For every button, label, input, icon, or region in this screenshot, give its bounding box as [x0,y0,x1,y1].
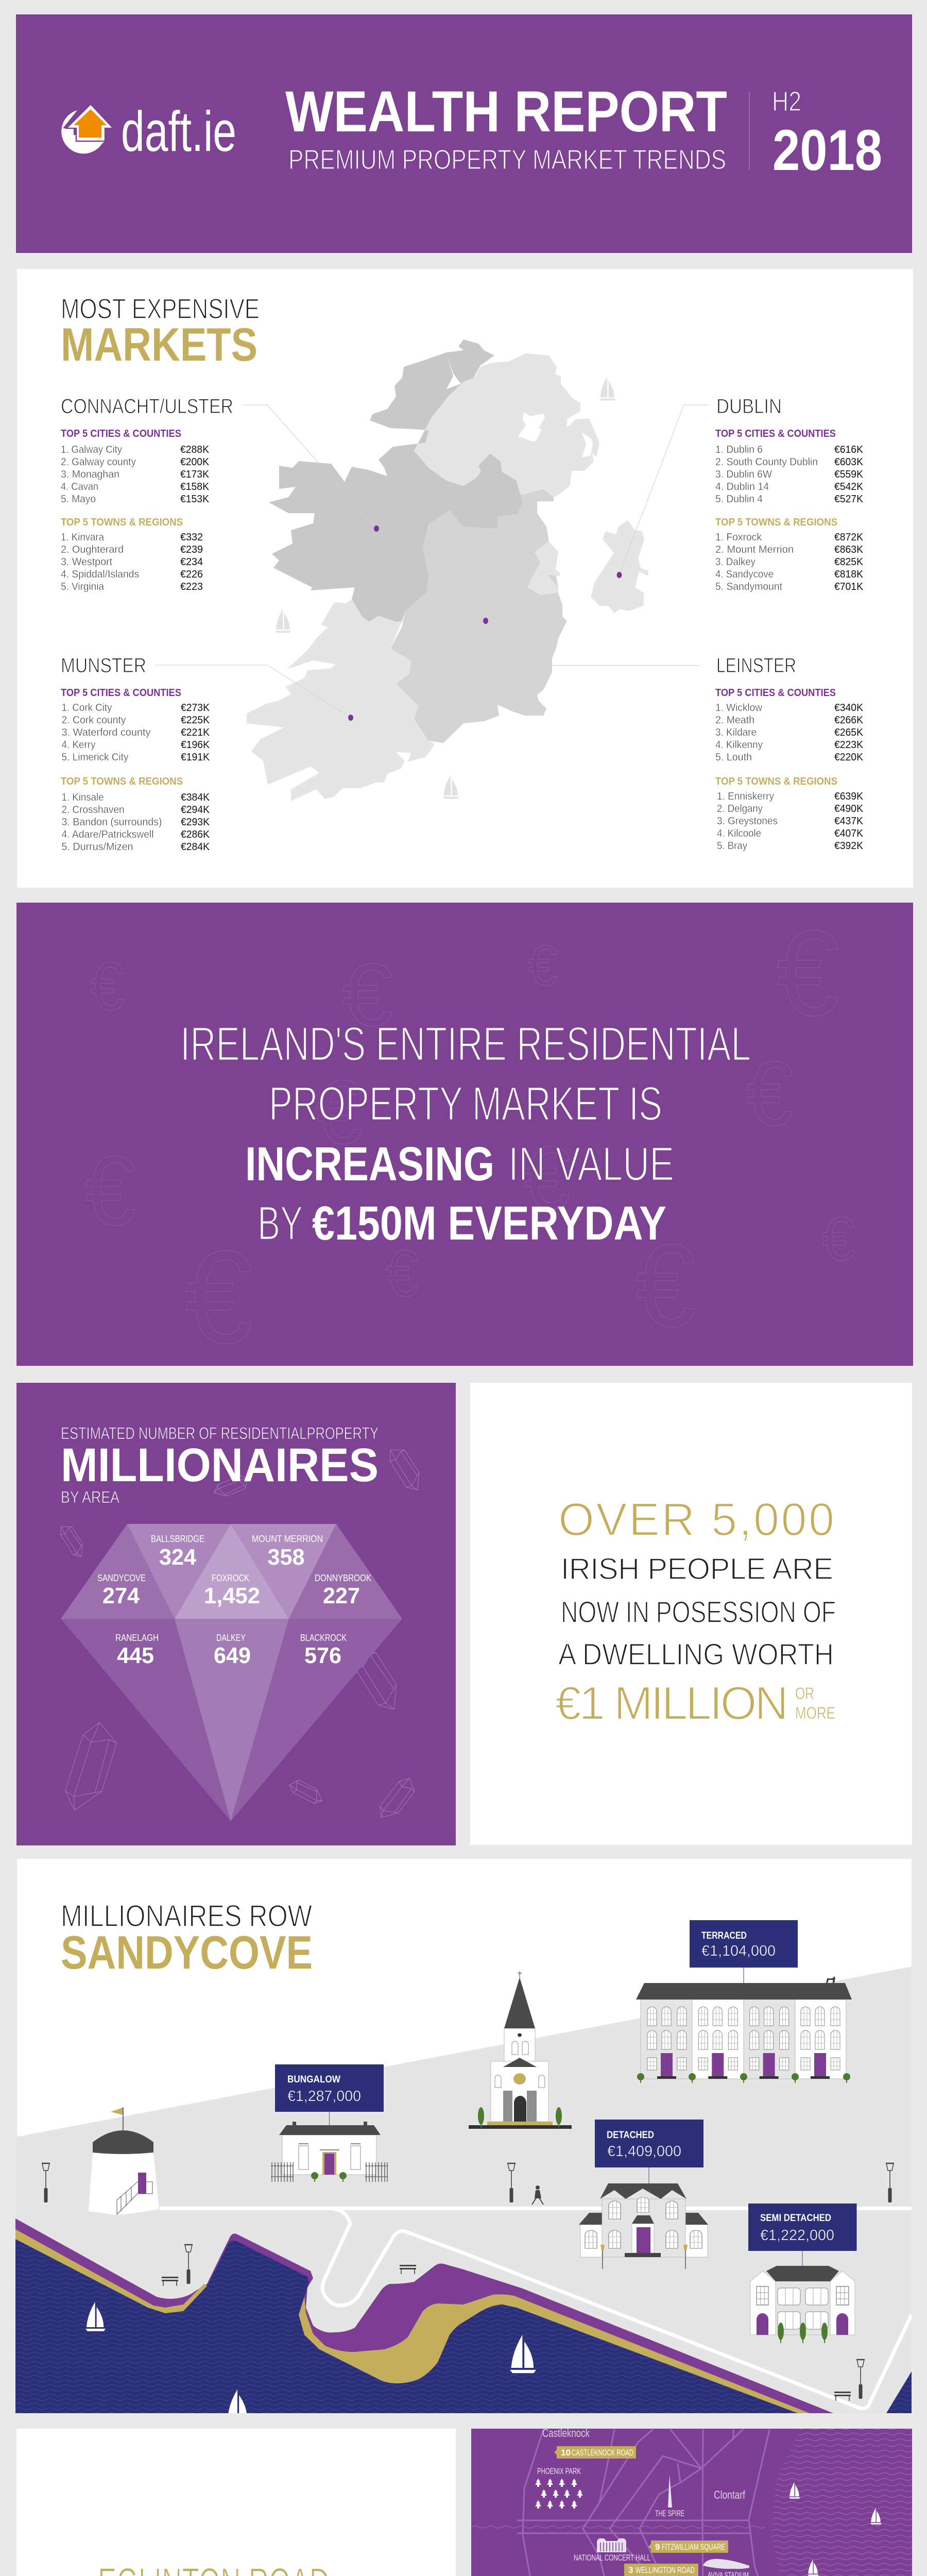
region: Munster: 5. Durrus/Mizen [62,841,133,853]
heading: millionaires: BY AREA [61,1488,120,1506]
subtitle: PREMIUM PROPERTY MARKET TRENDS [288,144,726,175]
panel: most expensive markets [17,269,913,888]
area: Ballsbridge: 324 [159,1545,197,1570]
region: Munster: 2. Cork county [62,715,126,726]
callout: bungalow price: €1,287,000 [287,2088,361,2105]
region: Connacht/Ulster: €226 [180,569,203,580]
street label 3: WELLINGTON ROAD [636,2565,695,2575]
region: Leinster: €437K [834,816,864,827]
area names [530,2427,864,2576]
region: Leinster: €490K [834,803,864,815]
area names: Clontarf [714,2488,746,2501]
background euro symbols [84,905,855,1371]
callout: bungalow price [275,2064,384,2125]
icon: daft.ie logo: daft.ie [121,100,236,163]
panel: millionaires row Sandycove [15,1859,912,2422]
region: Munster: 4. Kerry [62,739,96,751]
region: Leinster: €407K [834,828,864,839]
icon: daft.ie logo [61,100,236,163]
diamond chart [61,1524,402,1821]
region: Dublin: TOP 5 CITIES & COUNTIES [715,428,836,439]
area: Donnybrook: DONNYBROOK [315,1573,371,1583]
area: Sandycove [97,1573,146,1608]
heading: most expensive markets [61,293,260,371]
panel: over 5,000 people: MORE [795,1704,835,1722]
building: terraced houses [636,1976,852,2083]
region: Connacht/Ulster: €239 [180,544,203,555]
region: Leinster: €340K [834,702,864,714]
region: Munster: 3. Bandon (surrounds) [62,817,162,828]
icons: lamps and benches [42,2163,894,2401]
street label 3: 3 [628,2565,633,2575]
area: Sandycove: SANDYCOVE [97,1573,146,1583]
region: Leinster: 2. Delgany [717,803,763,815]
heading: Sandycove: MILLIONAIRES ROW [61,1899,312,1933]
area: Foxrock: 1,452 [204,1583,260,1608]
region: Munster: 4. Adare/Patrickswell [62,829,153,840]
region: Leinster [715,654,864,852]
region: Dublin: €603K [834,456,864,468]
area: Ranelagh [115,1633,159,1668]
panel: over 5,000 people [470,1383,912,1845]
heading: Sandycove: SANDYCOVE [61,1927,313,1979]
street label 3 [624,2564,698,2576]
region: Munster: TOP 5 TOWNS & REGIONS [61,776,183,787]
icons: sailboats [85,2302,536,2422]
region: Connacht/Ulster: 3. Monaghan [61,469,119,480]
street label 10 [554,2446,636,2459]
region: Dublin: TOP 5 TOWNS & REGIONS [715,517,837,528]
region: Munster: 1. Kinsale [62,792,104,803]
icon: walker [532,2185,543,2205]
region: Connacht/Ulster: TOP 5 CITIES & COUNTIES [61,428,181,439]
background euro symbols: € [746,1042,794,1145]
street label 10: CASTLEKNOCK ROAD [572,2448,633,2458]
region: Dublin: 5. Sandymount [715,581,782,592]
region: Dublin: €527K [834,494,864,505]
building: detached house [579,2183,708,2269]
region: Leinster: TOP 5 CITIES & COUNTIES [715,687,836,699]
region: Dublin: 4. Dublin 14 [715,481,769,493]
area: Dalkey: 649 [214,1643,251,1668]
landmark: National Concert Hall: NATIONAL CONCERT HALL [574,2553,650,2563]
region: Connacht/Ulster [61,395,233,592]
region: Munster: TOP 5 CITIES & COUNTIES [61,687,181,699]
region: Leinster: 1. Wicklow [715,702,763,714]
area names: Castleknock [542,2427,590,2439]
area: Blackrock: BLACKROCK [300,1633,347,1643]
panel: millionaires by area [16,1383,456,1845]
region: Dublin: 3. Dalkey [715,556,756,568]
illustrated coastline [15,1967,912,2422]
panel: over 5,000 people: NOW IN POSESSION OF [561,1596,836,1629]
region: Dublin: €872K [834,532,864,543]
region: Dublin: €559K [834,469,864,480]
region: Munster: €191K [181,752,210,763]
region: Munster: €384K [181,792,210,803]
background euro symbols: € [386,1237,419,1311]
area: Mount Merrion [252,1534,323,1570]
region: Munster: 2. Crosshaven [62,804,125,816]
icons: sailboats [789,2482,882,2576]
building: church [469,1971,572,2129]
region: Leinster: €220K [834,752,864,763]
region: Connacht/Ulster: 2. Oughterard [61,544,124,555]
landmark: The Spire [655,2475,684,2518]
area: Blackrock [300,1633,347,1668]
background euro symbols: € [822,1205,855,1274]
street label 9: 9 [655,2542,660,2552]
region: Leinster: 5. Bray [717,840,747,852]
background euro symbols: € [185,1224,253,1371]
panel: over 5,000 people: IRISH PEOPLE ARE [561,1552,833,1586]
region: Dublin: €701K [834,581,864,592]
period label: H2 [772,86,801,117]
region: Leinster: 2. Meath [715,715,754,726]
panel: market increase statement [16,903,913,1371]
background euro symbols: € [523,1128,571,1227]
heading: millionaires: MILLIONAIRES [61,1439,379,1492]
region: Munster: €294K [181,804,210,816]
street label 9 [648,2540,728,2553]
region: Connacht/Ulster: €332 [180,532,203,543]
region: Leinster: 5. Louth [715,752,752,763]
area: Donnybrook [315,1573,371,1608]
region: Munster: 3. Waterford county [62,727,150,738]
statement text: PROPERTY MARKET IS [269,1077,662,1130]
region: Dublin: €825K [834,556,864,568]
map markers and leader lines [155,405,709,718]
area: Sandycove: 274 [102,1583,140,1608]
sailboats [275,377,616,799]
callout: semi detached price: SEMI DETACHED [760,2213,831,2224]
region: Connacht/Ulster: €200K [180,456,210,468]
callout: terraced price: €1,104,000 [701,1943,776,1959]
road network [517,2429,770,2576]
region: Dublin: €863K [834,544,864,555]
street label 9: FITZWILLIAM SQUARE [662,2542,725,2552]
region: Leinster: TOP 5 TOWNS & REGIONS [715,776,837,787]
region: Munster: MUNSTER [61,654,146,677]
region: Connacht/Ulster: 5. Mayo [61,494,96,505]
year: 2018 [772,118,882,182]
region: Munster: €273K [181,702,210,714]
area: Blackrock: 576 [304,1643,341,1668]
inset: Dublin [591,520,648,613]
region: Connacht/Ulster: 1. Kinvara [61,532,105,543]
callout: terraced price [690,1920,798,1983]
statement text: IRELAND'S ENTIRE RESIDENTIAL [180,1017,751,1071]
landmark: National Concert Hall [574,2538,650,2563]
region: Leinster: 3. Greystones [717,816,778,827]
callout: detached price: DETACHED [607,2130,654,2141]
background euro symbols: € [776,905,839,1041]
region: Dublin: 3. Dublin 6W [715,469,772,480]
background euro symbols: € [342,945,393,1044]
region: Connacht/Ulster: 3. Westport [61,556,112,568]
region: Munster: 5. Limerick City [62,752,129,763]
building: bungalow [271,2122,388,2182]
statement text: INCREASING [245,1137,494,1191]
background euro symbols: € [636,1221,696,1351]
region: Connacht/Ulster: €234 [180,556,203,568]
landmark: Phoenix Park [535,2466,583,2509]
heading: Sandycove [61,1899,313,1979]
landmark: The Spire: THE SPIRE [655,2509,684,2518]
region: Connacht/Ulster: 5. Virginia [61,581,105,592]
background crystals [54,1443,430,1825]
panel: over 5,000 people: OR [795,1684,814,1703]
region: Connacht/Ulster: CONNACHT/ULSTER [61,395,233,418]
region: Leinster: €639K [834,791,864,802]
callout: detached price: €1,409,000 [607,2143,681,2160]
region: Connacht/Ulster: €288K [180,444,210,455]
heading: millionaires: ESTIMATED NUMBER OF RESIDENTIALPROPERTY [61,1424,379,1443]
panel: top 10 streets map [471,2427,912,2576]
region: Leinster: 4. Kilkenny [715,739,763,751]
region: Dublin: 5. Dublin 4 [715,494,763,505]
region: Munster: €293K [181,817,210,828]
region: Leinster: €392K [834,840,864,852]
street label 10: 10 [561,2448,571,2458]
region: Dublin: 1. Dublin 6 [715,444,763,455]
background euro symbols: € [528,934,558,997]
panel: over 5,000 people: OVER 5,000 [558,1494,834,1546]
region: Munster: €221K [181,727,210,738]
region: Leinster: 4. Kilcoole [717,828,761,839]
region: Leinster: LEINSTER [716,654,796,677]
region: Munster: €225K [181,715,210,726]
area: Ranelagh: 445 [117,1643,154,1668]
statement text: €150M EVERYDAY [312,1196,666,1250]
area: Mount Merrion: MOUNT MERRION [252,1534,323,1544]
region: Connacht/Ulster: TOP 5 TOWNS & REGIONS [61,517,183,528]
landmark: Phoenix Park: PHOENIX PARK [537,2466,581,2476]
background euro symbols: € [316,1062,362,1163]
region: Dublin: 2. Mount Merrion [715,544,794,555]
panel: over 5,000 people: €1 MILLION [555,1677,788,1730]
region: Connacht/Ulster: €153K [180,494,210,505]
region: Leinster: €223K [834,739,864,751]
region: Dublin: DUBLIN [716,395,782,418]
statement text [180,1017,751,1250]
background euro symbols: € [84,1135,136,1246]
area: Ranelagh: RANELAGH [115,1633,159,1643]
area: Donnybrook: 227 [323,1583,360,1608]
region: Dublin: 2. South County Dublin [715,456,818,468]
region: Leinster: 3. Kildare [715,727,757,738]
region: Leinster: €265K [834,727,864,738]
region: Leinster: €266K [834,715,864,726]
map of Ireland [155,340,709,801]
region: Connacht/Ulster: €173K [180,469,210,480]
callout: detached price [595,2120,703,2183]
region: Connacht/Ulster: 2. Galway county [61,456,136,468]
region: Dublin: €818K [834,569,864,580]
region: Dublin: €616K [834,444,864,455]
panel: Eglinton Road statement [16,2429,456,2576]
region: Dublin: 1. Foxrock [715,532,762,543]
heading: most expensive markets: MOST EXPENSIVE [61,293,260,325]
building: semi detached house [750,2266,855,2343]
building: Martello tower [89,2107,159,2215]
region: Connacht/Ulster: €223 [180,581,203,592]
region: Munster: €286K [181,829,210,840]
callout: semi detached price: €1,222,000 [760,2227,834,2244]
background euro symbols: € [90,948,124,1024]
icon: cat [826,1976,835,1983]
area: Mount Merrion: 358 [268,1545,305,1570]
panel: header [16,14,912,253]
heading: millionaires [61,1424,379,1506]
region: Dublin: 4. Sandycove [715,569,774,580]
panel: over 5,000 people: A DWELLING WORTH [558,1638,834,1671]
area: Ballsbridge: BALLSBRIDGE [151,1534,204,1544]
region: Dublin [715,395,864,592]
region: Leinster: 1. Enniskerry [717,791,774,802]
region: Munster [61,654,210,853]
statement text: BY [258,1196,303,1250]
region: Connacht/Ulster: €158K [180,481,210,493]
heading: most expensive markets: MARKETS [61,319,258,371]
title: WEALTH REPORT [285,79,727,144]
region: Munster: €284K [181,841,210,853]
sea texture [471,2429,912,2576]
region: Connacht/Ulster: 4. Spiddal/Islands [61,569,139,580]
area: Dalkey: DALKEY [216,1633,246,1643]
region: Munster: €196K [181,739,210,751]
region: Connacht/Ulster: 1. Galway City [61,444,122,455]
area: Foxrock: FOXROCK [212,1573,249,1583]
callout: terraced price: TERRACED [701,1930,747,1941]
landmark: Aviva Stadium [703,2559,749,2576]
callout: bungalow price: BUNGALOW [287,2074,340,2085]
callout: semi detached price [748,2204,857,2266]
region: Connacht/Ulster: 4. Cavan [61,481,98,493]
area: Ballsbridge [151,1534,204,1570]
region: Dublin: €542K [834,481,864,493]
region: Munster: 1. Cork City [62,702,112,714]
statement text: IN VALUE [508,1137,674,1191]
